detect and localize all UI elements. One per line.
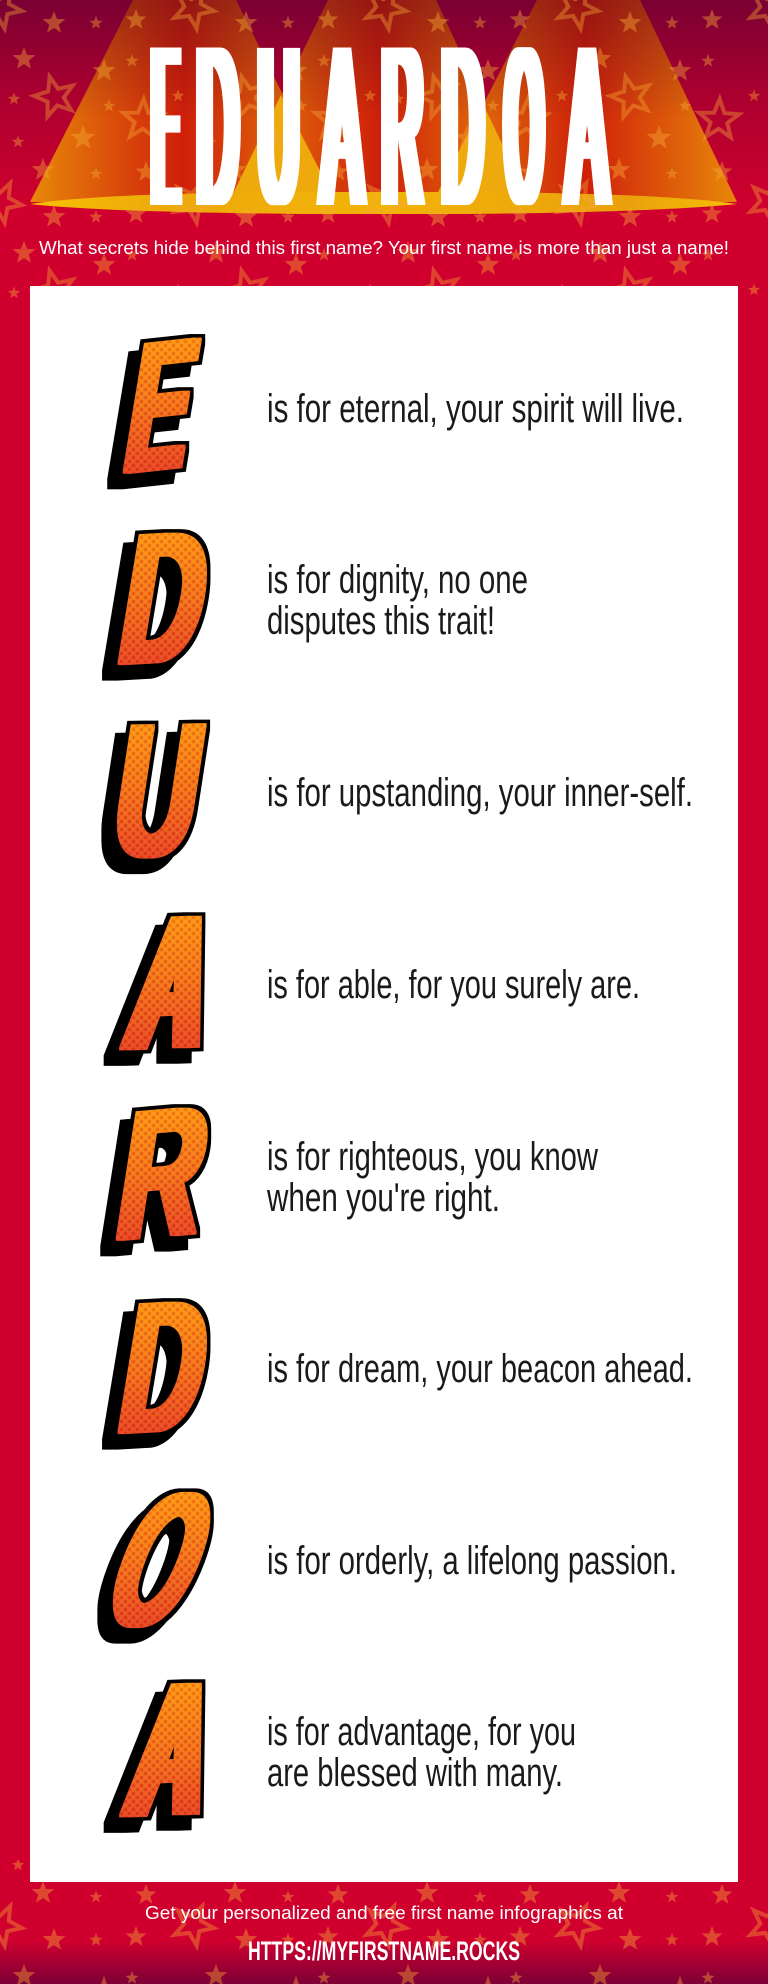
text: D lines: is for dignity, no one [267,558,528,602]
letter R: R [106,1067,221,1279]
text: A line: is for able, for you surely are. [267,963,640,1007]
title [153,0,607,255]
text: D lines: disputes this trait! [267,599,495,643]
star pattern: header [0,0,768,298]
panel: white content card [30,286,738,1882]
letter A: A [115,875,231,1090]
title: D [197,0,238,254]
letter D: D [107,1261,223,1473]
spotlights [30,0,737,214]
letter E: E [114,300,210,513]
title: R [382,0,422,255]
title: D [442,0,483,254]
text: A lines: is for advantage, for you [267,1710,576,1754]
spotlight: centre cone [229,0,530,202]
text: R lines: when you're right. [266,1176,500,1220]
title: A [567,0,607,254]
letter D: D [107,492,223,704]
spotlight: left cone [30,0,336,202]
letter U: U [102,685,216,897]
title: A [322,0,362,254]
spotlight overlaps [229,95,530,202]
star pattern: footer [0,1860,768,1984]
text: A lines: are blessed with many. [267,1751,563,1795]
spotlight: right cone [433,0,737,202]
letter O: O [83,1452,240,1667]
text: R lines [266,1135,598,1220]
text: D lines [267,558,528,643]
title: O [506,2,542,251]
letter A: A [115,1642,231,1857]
title: U [259,0,298,251]
text: A lines [267,1710,576,1795]
title: E [153,0,178,254]
footer call to action: Get your personalized and free first name infographics at [145,1903,623,1923]
footer url: HTTPS://MYFIRSTNAME.ROCKS [248,1936,520,1966]
spotlight pool of light [30,192,737,214]
text: R lines: is for righteous, you know [267,1135,598,1179]
subtitle: What secrets hide behind this first name? Your first name is more than just a name! [39,238,729,258]
